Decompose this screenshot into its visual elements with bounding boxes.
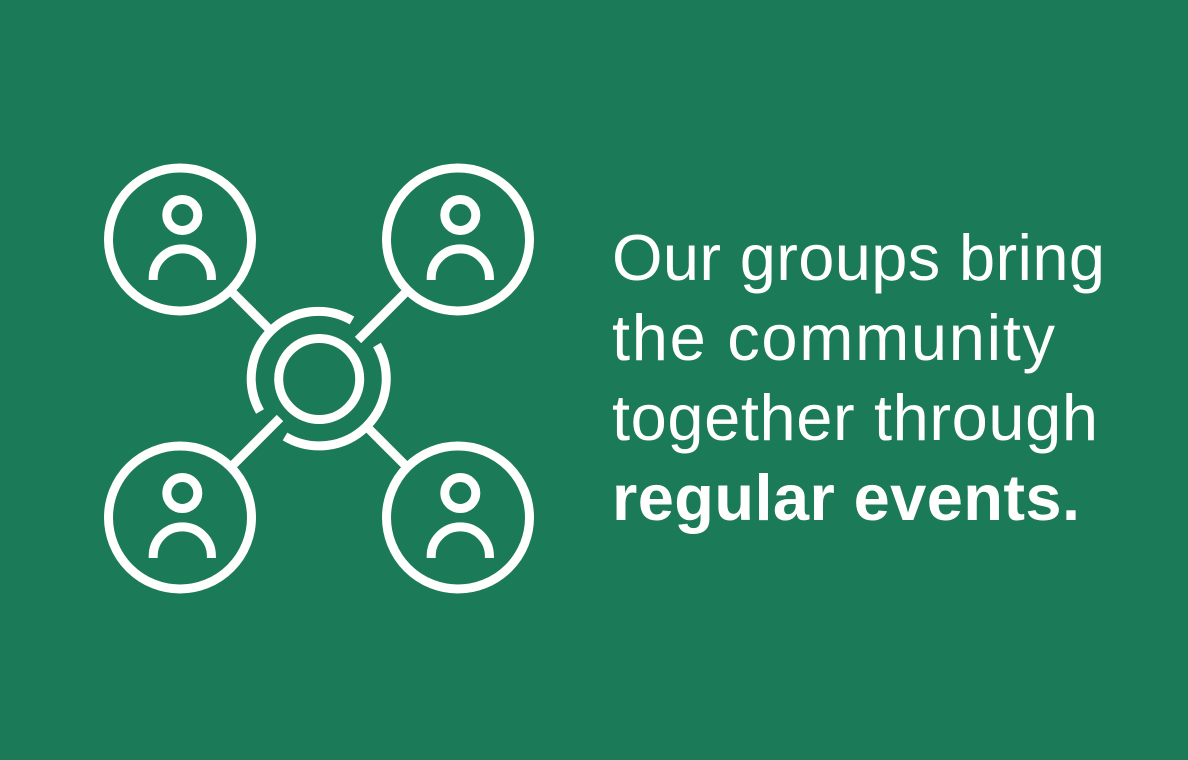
icon: community network xyxy=(108,168,530,589)
line 4: bold emphasis: regular events. xyxy=(612,461,1080,534)
line 3: together through xyxy=(612,381,1098,454)
hub: outer ring top-left arc xyxy=(251,311,352,412)
connector: top left xyxy=(230,290,272,332)
connector: top right xyxy=(358,290,408,340)
person: bottom right xyxy=(386,446,530,589)
hub: outer ring bottom-right arc xyxy=(285,345,386,446)
line 1: Our groups bring xyxy=(612,221,1105,294)
person: top right xyxy=(386,168,530,311)
hub: inner ring xyxy=(279,338,360,420)
connector: bottom right xyxy=(366,426,408,468)
person: bottom left xyxy=(108,446,252,589)
text block: message xyxy=(612,221,1105,534)
connector: bottom left xyxy=(230,418,280,468)
line 2: the community xyxy=(612,301,1056,374)
person: top left xyxy=(108,168,252,311)
